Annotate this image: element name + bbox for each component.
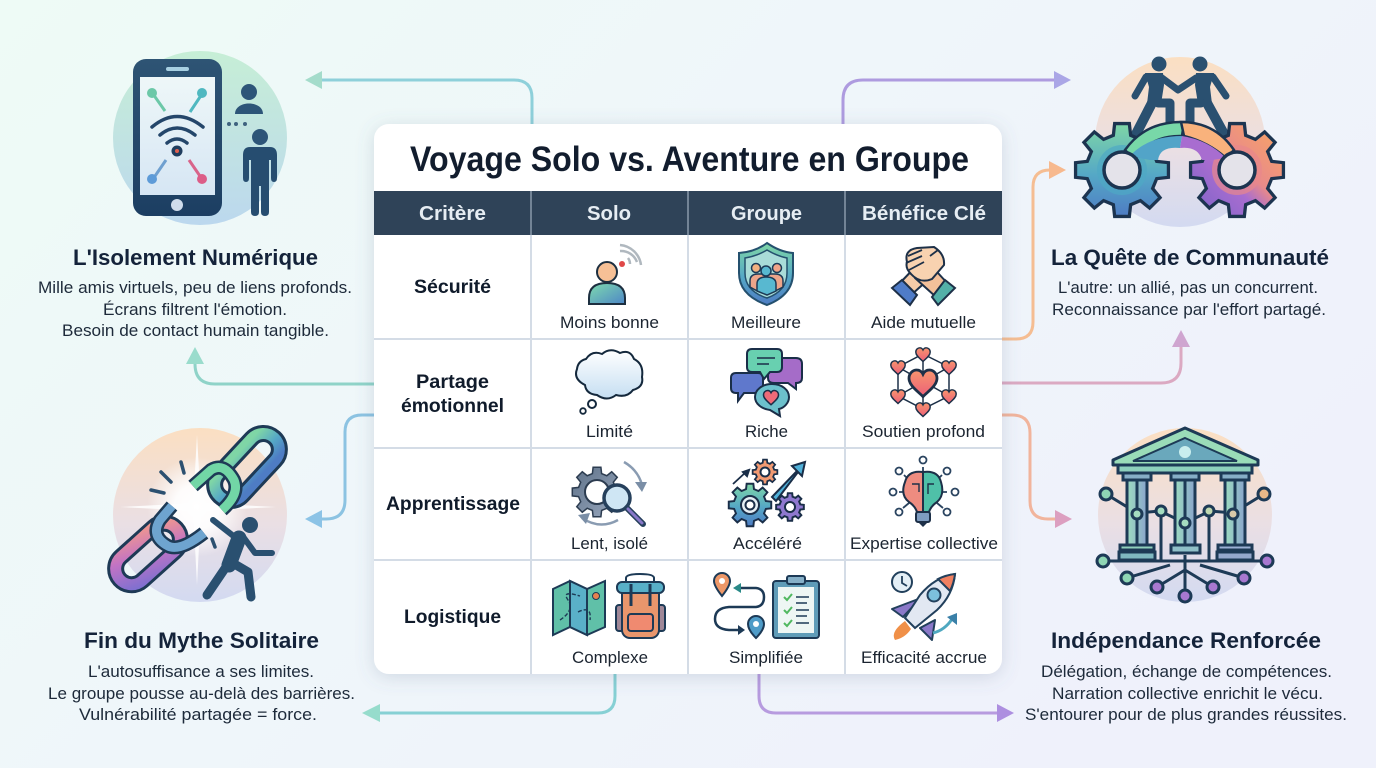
arrow: table to independence <box>1002 415 1072 528</box>
text: digital isolation: Écrans filtrent l'émotion. <box>103 300 287 319</box>
text: digital isolation <box>38 278 352 340</box>
cell: logistics benefit: Efficacité accrue <box>861 648 987 667</box>
text: solitary myth: L'autosuffisance a ses limites. <box>88 662 314 681</box>
cell: logistics benefit <box>861 572 987 667</box>
text: solitary myth: Vulnérabilité partagée = force. <box>79 705 317 724</box>
cell: sharing solo <box>576 350 642 441</box>
text: independence <box>1025 662 1347 724</box>
cell: learning group <box>729 460 805 553</box>
text: solitary myth <box>48 662 355 724</box>
text: community: Reconnaissance par l'effort partagé. <box>1052 300 1326 319</box>
text: digital isolation: Besoin de contact humain tangible. <box>62 321 329 340</box>
row labels: émotionnel <box>401 396 504 417</box>
arrow: table to community <box>843 71 1071 124</box>
heading: community: La Quête de Communauté <box>1051 245 1329 270</box>
arrow: security to community <box>1002 161 1066 339</box>
cell: security group <box>731 243 801 332</box>
text: digital isolation: Mille amis virtuels, peu de liens profonds. <box>38 278 352 297</box>
cell: security group: Meilleure <box>731 313 801 332</box>
text: solitary myth: Le groupe pousse au-delà des barrières. <box>48 684 355 703</box>
icon: phone and isolated people <box>113 51 287 225</box>
cell: learning solo: Lent, isolé <box>571 534 648 553</box>
arrow: table to broken myth <box>305 415 374 528</box>
cell: sharing benefit <box>862 348 985 441</box>
arrow: table to digital isolation <box>305 71 532 124</box>
row labels: Logistique <box>404 607 501 628</box>
cell: logistics solo <box>553 574 665 667</box>
heading: independence: Indépendance Renforcée <box>1051 628 1321 653</box>
row labels: Sécurité <box>414 277 491 298</box>
arrow: bottom to independence <box>759 674 1014 722</box>
cell: learning group: Accéléré <box>733 534 802 553</box>
icon: broken chain and runner <box>109 427 287 602</box>
heading: digital isolation: L'Isolement Numérique <box>73 245 318 270</box>
icon: handshake on gears <box>1076 56 1283 227</box>
cell: sharing solo: Limité <box>586 422 633 441</box>
cell: logistics group <box>714 573 819 667</box>
heading: solitary myth: Fin du Mythe Solitaire <box>84 628 319 653</box>
cell: sharing text: Riche <box>745 422 788 441</box>
cell: logistics solo: Complexe <box>572 648 648 667</box>
icon: temple network <box>1097 428 1273 602</box>
cell: learning benefit: Expertise collective <box>850 534 998 553</box>
row labels: Apprentissage <box>386 494 520 515</box>
arrow: partage to community <box>1002 330 1190 383</box>
cell: sharing group <box>731 349 802 416</box>
row labels <box>386 277 520 628</box>
text: independence: Narration collective enrichit le vécu. <box>1052 684 1323 703</box>
arrow: bottom to broken myth <box>362 674 615 722</box>
row labels: Partage <box>416 372 489 393</box>
cell: sharing benefit: Soutien profond <box>862 422 985 441</box>
cell: security solo: Moins bonne <box>560 313 659 332</box>
table header: Critère <box>419 203 486 225</box>
cell: security benefit <box>871 247 976 332</box>
panel: comparison table <box>374 124 1002 674</box>
text: independence: S'entourer pour de plus grandes réussites. <box>1025 705 1347 724</box>
table header: Groupe <box>731 203 802 225</box>
table header <box>374 191 1002 235</box>
cell: security benefit: Aide mutuelle <box>871 313 976 332</box>
table header: Bénéfice Clé <box>862 203 986 225</box>
text: independence: Délégation, échange de compétences. <box>1041 662 1332 681</box>
text: community <box>1052 278 1326 319</box>
arrow: partage to digital isolation <box>186 347 374 384</box>
cell: learning solo <box>571 462 648 553</box>
title: Voyage Solo vs. Aventure en Groupe <box>410 140 969 179</box>
text: community: L'autre: un allié, pas un concurrent. <box>1058 278 1318 297</box>
cell: logistics group: Simplifiée <box>729 648 803 667</box>
cell: security solo <box>560 245 659 332</box>
cell: learning benefit <box>850 456 998 553</box>
table header: Solo <box>587 203 631 225</box>
